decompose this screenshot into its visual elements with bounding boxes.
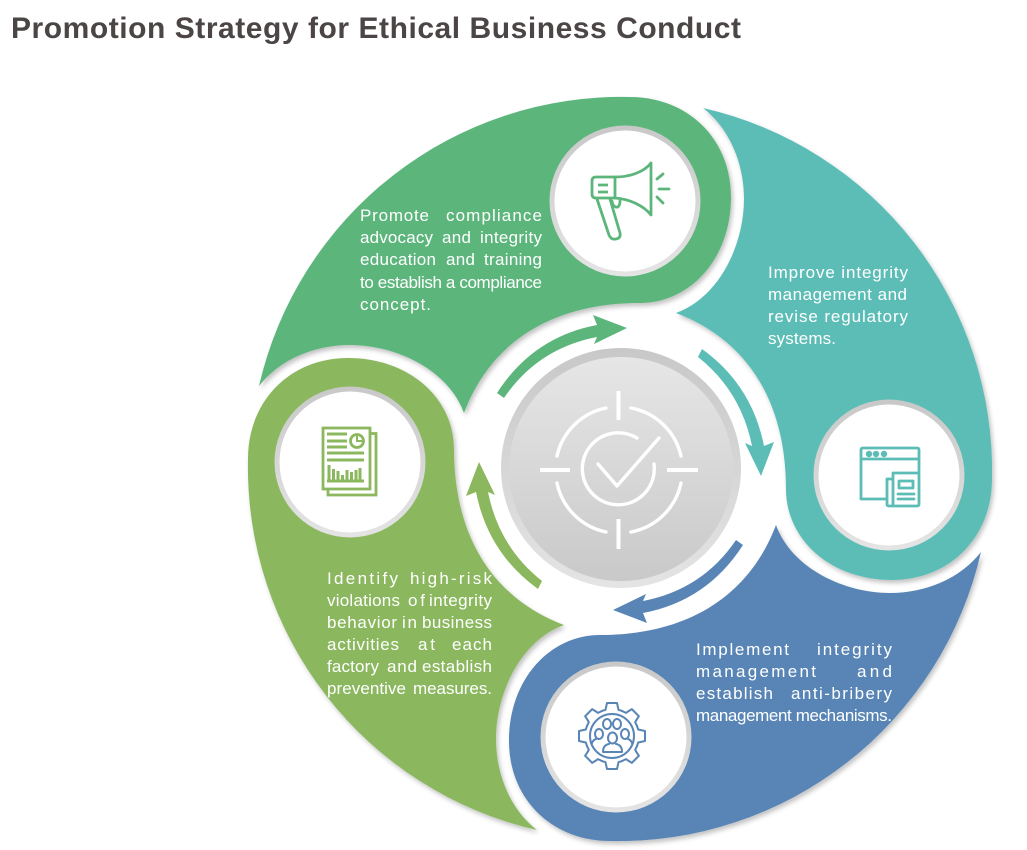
text: green panel: training (484, 250, 542, 269)
text: green panel: advocacy (360, 228, 434, 247)
text: green panel: and (442, 228, 471, 247)
text: light green panel: integrity (429, 591, 492, 610)
text: light green panel: behavior (327, 613, 397, 632)
center target disc (501, 348, 741, 588)
text: green panel: to establish a compliance (360, 273, 542, 292)
icon: target with check mark (540, 391, 698, 549)
text: green panel: and (446, 250, 475, 269)
text: teal panel: revise regulatory (768, 307, 908, 326)
text: light green panel: establish (422, 657, 492, 676)
text: light green panel: factory (327, 657, 380, 676)
text: blue panel: Implement (696, 640, 789, 659)
text: blue panel: anti-bribery (791, 684, 892, 703)
icon badge: browser and newspaper (814, 400, 964, 550)
text: blue panel: integrity (817, 640, 892, 659)
icon badge: gear with people (540, 662, 692, 812)
text: teal panel (768, 263, 908, 348)
text: blue panel: management (696, 662, 816, 681)
arrow: light green (466, 462, 542, 589)
text: light green panel: violations (327, 591, 400, 610)
text: green panel: integrity (480, 228, 542, 247)
panel: green segment (259, 97, 731, 413)
arrow: blue (613, 540, 743, 623)
panel: teal segment (676, 108, 992, 580)
text: light green panel: business (422, 613, 492, 632)
panel: light green segment (248, 358, 564, 830)
text: blue panel: establish (696, 684, 773, 703)
arrow: green (497, 315, 627, 398)
text: light green panel: high-risk (410, 569, 492, 588)
text: light green panel: activities (327, 635, 399, 654)
text: green panel: compliance (446, 206, 542, 225)
text: blue panel: management mechanisms. (696, 706, 892, 725)
text: green panel (360, 206, 542, 314)
text: light green panel: Identify (327, 569, 398, 588)
text: green panel: Promote (360, 206, 429, 225)
panel: blue segment (509, 525, 981, 841)
text: light green panel: and (387, 657, 417, 676)
text: light green panel: each (452, 635, 492, 654)
arrow: teal (698, 349, 774, 476)
text: light green panel: at (418, 635, 435, 654)
text: teal panel: Improve integrity (768, 263, 908, 282)
icon badge: report document (274, 386, 426, 538)
text: light green panel: measures. (413, 679, 492, 698)
text: blue panel: and (857, 662, 892, 681)
text: light green panel: in (402, 613, 417, 632)
text: light green panel: preventive (327, 679, 406, 698)
text: teal panel: systems. (768, 329, 836, 348)
text: green panel: education (360, 250, 436, 269)
text: blue panel (696, 640, 892, 725)
title: Promotion Strategy for Ethical Business Conduct (11, 12, 741, 45)
text: green panel: concept. (360, 295, 431, 314)
icon badge: megaphone (550, 126, 700, 276)
text: light green panel (327, 569, 492, 698)
text: light green panel: of (408, 591, 425, 610)
text: teal panel: management and (768, 285, 907, 304)
